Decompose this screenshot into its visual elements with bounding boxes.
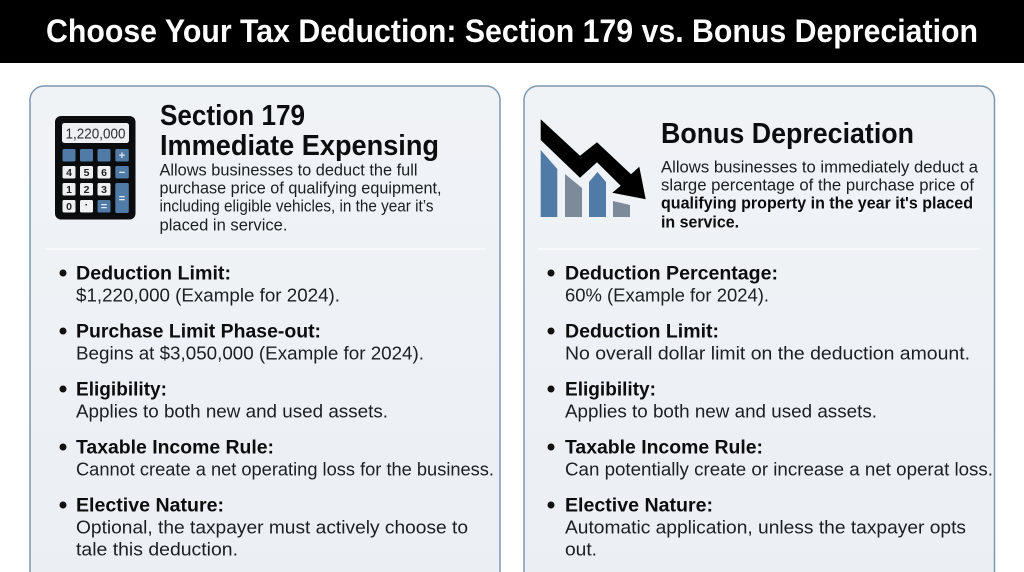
item: Elective Nature: Optional, the taxpayer must actively choose to — [76, 516, 468, 538]
item: Deduction Limit: Deduction Limit: — [76, 262, 231, 284]
item: Eligibility: Applies to both new and used assets. — [565, 400, 877, 422]
description: Section 179: placed in service. — [160, 216, 288, 234]
description: Section 179: purchase price of qualifying equipment, — [160, 178, 442, 198]
icon: calculator: 3 — [101, 184, 107, 196]
panel: Section 179 — [30, 86, 500, 572]
item: Elective Nature — [548, 494, 966, 560]
item: Elective Nature: out. — [565, 538, 597, 560]
item: Eligibility — [60, 378, 388, 422]
item: Taxable Income Rule: Can potentially create or increase a net operat loss. — [565, 458, 993, 480]
item: Taxable Income Rule: Taxable Income Rule: — [565, 436, 763, 458]
heading: Section 179 Immediate Expensing: Immediate Expensing — [160, 130, 439, 162]
icon: calculator: 5 — [84, 167, 90, 179]
heading: Bonus Depreciation: Bonus Depreciation — [661, 118, 914, 150]
icon: declining bars with arrow — [541, 119, 646, 217]
icon: calculator: · — [85, 199, 88, 211]
item: Eligibility — [548, 378, 877, 422]
icon: calculator: + — [119, 150, 125, 162]
item: Elective Nature: Automatic application, unless the taxpayer opts — [565, 516, 966, 538]
item: Elective Nature: Elective Nature: — [76, 494, 224, 516]
title banner — [0, 0, 1024, 63]
icon: calculator: 1,220,000 — [66, 126, 126, 142]
item: Elective Nature: tale this deduction. — [76, 538, 238, 560]
icon: calculator: = — [101, 201, 107, 213]
icon: calculator: = — [119, 193, 125, 205]
item: Deduction Limit — [60, 262, 340, 306]
item: Purchase Limit Phase-out — [60, 320, 424, 364]
icon: calculator: 2 — [84, 184, 90, 196]
icon: calculator: 1 — [66, 184, 72, 196]
item: Taxable Income Rule — [60, 436, 494, 480]
description: Bonus Depreciation: qualifying property in the year it's placed — [661, 194, 973, 212]
item: Deduction Percentage: Deduction Percentage: — [565, 262, 778, 284]
item: Deduction Limit: $1,220,000 (Example for 2024). — [76, 284, 340, 306]
heading: Section 179 Immediate Expensing — [160, 100, 439, 162]
icon: calculator: − — [119, 167, 125, 179]
item: Purchase Limit Phase-out: Purchase Limit Phase-out: — [76, 320, 321, 342]
title banner: Choose Your Tax Deduction: Section 179 vs. Bonus Depreciation — [46, 13, 978, 49]
item: Eligibility: Eligibility: — [565, 378, 656, 400]
icon: calculator: 6 — [101, 167, 107, 179]
item: Deduction Limit: No overall dollar limit on the deduction amount. — [565, 342, 970, 364]
description: Section 179: Allows businesses to deduct the full — [160, 160, 418, 180]
item: Eligibility: Eligibility: — [76, 378, 167, 400]
heading: Section 179 Immediate Expensing: Section 179 — [160, 100, 305, 132]
description: Bonus Depreciation: Allows businesses to immediately deduct a — [661, 158, 979, 176]
item: Eligibility: Applies to both new and used assets. — [76, 400, 388, 422]
item: Elective Nature: Elective Nature: — [565, 494, 713, 516]
description: Section 179: including eligible vehicles, in the year it’s — [160, 196, 434, 216]
item: Deduction Limit — [548, 320, 970, 364]
item: Deduction Limit: Deduction Limit: — [565, 320, 719, 342]
panel: Bonus Depreciation — [524, 86, 994, 572]
icon: calculator — [55, 116, 136, 220]
item: Taxable Income Rule — [548, 436, 993, 480]
item: Taxable Income Rule: Taxable Income Rule: — [76, 436, 274, 458]
icon: calculator: 0 — [66, 201, 72, 213]
description: Bonus Depreciation — [661, 158, 979, 232]
item: Deduction Percentage — [548, 262, 778, 306]
icon: calculator: 4 — [66, 167, 72, 179]
item: Deduction Percentage: 60% (Example for 2024). — [565, 284, 769, 306]
description: Section 179 — [160, 160, 442, 234]
description: Bonus Depreciation: slarge percentage of the purchase price of — [661, 176, 974, 194]
item: Purchase Limit Phase-out: Begins at $3,050,000 (Example for 2024). — [76, 342, 424, 364]
item: Taxable Income Rule: Cannot create a net operating loss for the business. — [76, 458, 494, 480]
description: Bonus Depreciation: in service. — [661, 212, 739, 232]
item: Elective Nature — [60, 494, 468, 560]
